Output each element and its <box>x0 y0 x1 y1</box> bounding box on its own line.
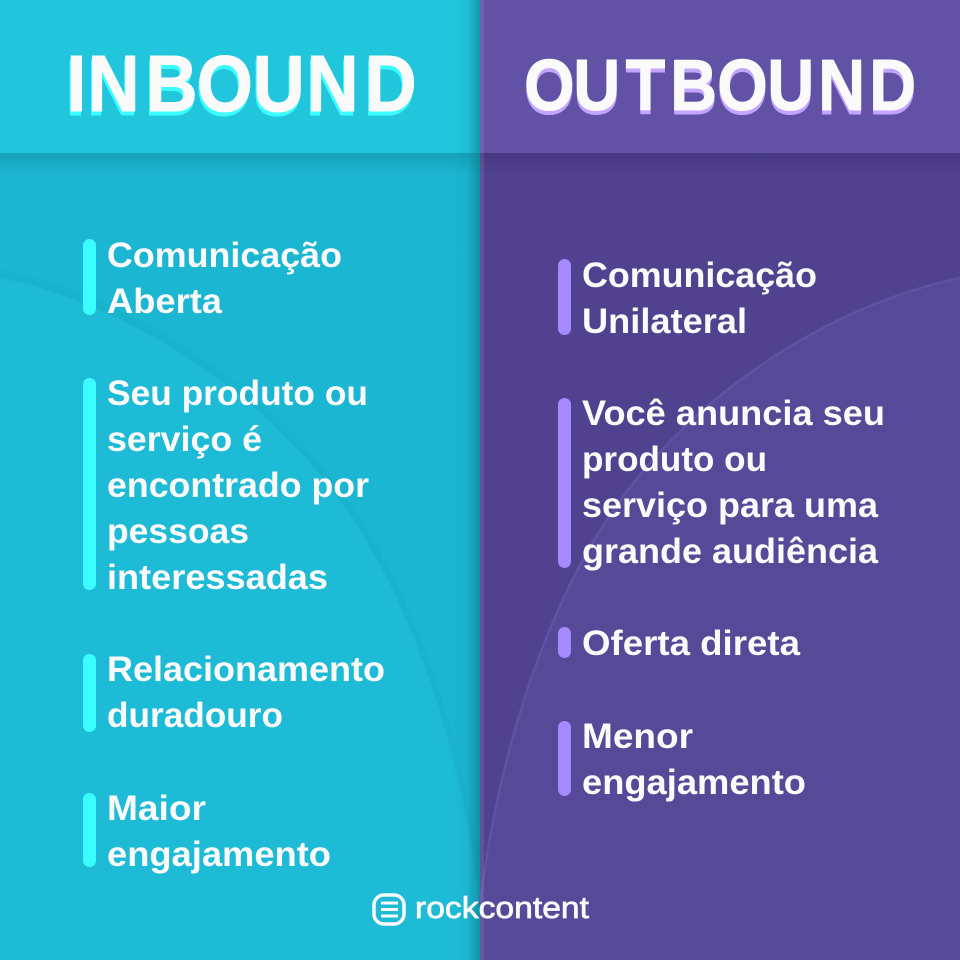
inbound item: Comunicação Aberta: Comunicação <box>107 236 342 275</box>
outbound item: Comunicação Unilateral: Unilateral <box>582 302 747 341</box>
inbound item: Comunicação Aberta: Aberta <box>107 282 223 321</box>
panel: inbound background <box>0 0 480 960</box>
panel: outbound background <box>480 0 960 960</box>
outbound item: Menor engajamento: engajamento <box>582 763 806 802</box>
inbound item: Relacionamento duradouro <box>83 650 385 735</box>
title: OUTBOUND: OUTBOUND <box>524 45 916 126</box>
outbound item: Você anuncia seu produto ou serviço para uma grande audiência: produto ou <box>582 440 767 479</box>
outbound item: Menor engajamento: Menor <box>582 717 693 756</box>
outbound item: Você anuncia seu produto ou serviço para uma grande audiência <box>558 394 885 571</box>
icon: logo mark <box>374 895 404 924</box>
inbound item: Maior engajamento <box>83 789 331 874</box>
outbound item: Você anuncia seu produto ou serviço para uma grande audiência: serviço para uma <box>582 486 879 525</box>
title: OUTBOUND: OUTBOUND <box>524 49 916 130</box>
inbound item: Seu produto ou serviço é encontrado por pessoas interessadas: encontrado por <box>107 466 369 505</box>
inbound item: Seu produto ou serviço é encontrado por pessoas interessadas <box>83 374 369 597</box>
outbound item: Você anuncia seu produto ou serviço para uma grande audiência: Você anuncia seu <box>582 394 885 433</box>
title: INBOUND: INBOUND <box>65 44 416 133</box>
inbound item: Relacionamento duradouro: Relacionamento <box>107 650 385 689</box>
logo: rockcontent: rockcontent <box>415 890 589 925</box>
outbound item: Oferta direta: Oferta direta <box>582 624 801 663</box>
inbound item: Maior engajamento: engajamento <box>107 835 331 874</box>
outbound item: Comunicação Unilateral <box>558 256 817 341</box>
inbound item: Seu produto ou serviço é encontrado por pessoas interessadas: Seu produto ou <box>107 374 368 413</box>
outbound item: Você anuncia seu produto ou serviço para uma grande audiência: grande audiência <box>582 532 879 571</box>
inbound item: Seu produto ou serviço é encontrado por pessoas interessadas: serviço é <box>107 420 262 459</box>
inbound item: Seu produto ou serviço é encontrado por pessoas interessadas: pessoas <box>107 512 249 551</box>
outbound item: Comunicação Unilateral: Comunicação <box>582 256 817 295</box>
inbound item: Seu produto ou serviço é encontrado por pessoas interessadas: interessadas <box>107 558 328 597</box>
inbound item: Comunicação Aberta <box>83 236 342 321</box>
outbound item: Menor engajamento <box>558 717 806 802</box>
title: INBOUND: INBOUND <box>66 40 417 129</box>
inbound item: Maior engajamento: Maior <box>107 789 206 828</box>
inbound item: Relacionamento duradouro: duradouro <box>107 696 283 735</box>
